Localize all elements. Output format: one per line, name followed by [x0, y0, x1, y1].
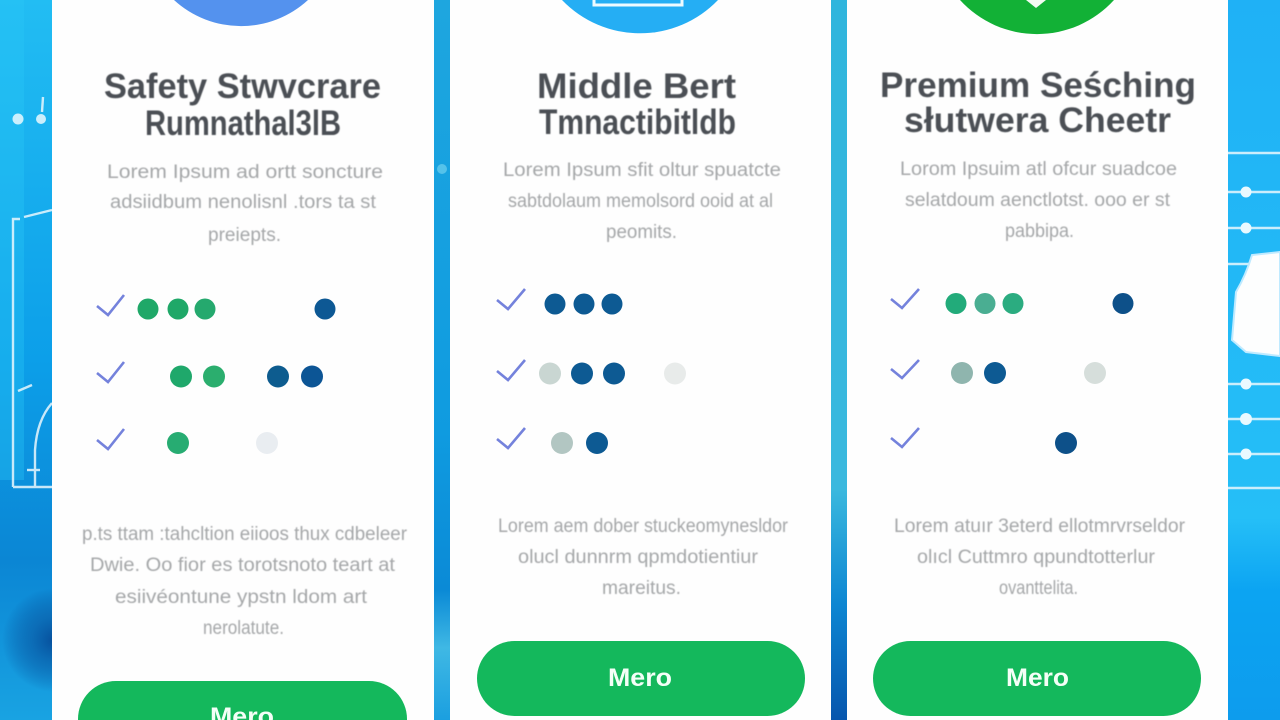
description [900, 159, 1177, 242]
description: pabbipa. [1005, 221, 1074, 242]
heading [537, 67, 736, 142]
feature row 3 [891, 428, 1077, 454]
heading: Premium Seśching [880, 66, 1196, 105]
body text: p.ts ttam :tahcltion eiioos thux cdbeleer [82, 524, 408, 545]
description [503, 160, 781, 243]
feature row 1 [891, 289, 1134, 314]
decoration: left circuit lines [12, 97, 52, 487]
icon: blue circle with screen [562, 0, 718, 33]
body text: mareitus. [602, 578, 681, 599]
button: Mero [608, 664, 672, 692]
feature row 1 [497, 289, 622, 314]
heading: Tmnactibitldb [539, 103, 736, 142]
panel: safety card [52, 0, 434, 720]
description: Lorem Ipsum sfit oltur spuatcte [503, 160, 781, 181]
body text: Dwie. Oo fior es torotsnoto teart at [90, 555, 396, 576]
panel: middle card [450, 0, 831, 720]
body text [894, 516, 1186, 599]
description: preiepts. [208, 225, 281, 246]
body text: esiivéontune ypstn ldom art [115, 587, 368, 608]
body text: olıcl Cuttmro qpundtotterlur [917, 547, 1156, 568]
button [78, 681, 407, 720]
feature row 3 [97, 429, 278, 454]
description: peomits. [606, 222, 677, 243]
icon: green circle with check [960, 0, 1114, 34]
button [873, 641, 1201, 716]
panel: premium card [847, 0, 1228, 720]
heading: Middle Bert [537, 67, 736, 106]
icon: blue circle [174, 0, 308, 26]
description: Lorem Ipsum ad ortt soncture [107, 162, 383, 183]
body text: nerolatute. [203, 618, 284, 639]
body text: Lorem aem dober stuckeomynesldor [498, 516, 789, 537]
button: Mero [1006, 664, 1069, 692]
feature row 2 [891, 360, 1106, 384]
heading: Rumnathal3lB [145, 104, 341, 143]
feature row 2 [497, 360, 686, 384]
heading: Safety Stwvcrare [104, 67, 381, 106]
heading [880, 66, 1196, 140]
body text [498, 516, 789, 599]
heading: słutwera Cheetr [904, 101, 1171, 140]
feature row 2 [97, 362, 323, 388]
heading [104, 67, 381, 143]
feature row 1 [97, 295, 336, 320]
feature row 3 [497, 428, 608, 454]
body text [82, 524, 408, 639]
description: Lorom Ipsuim atl ofcur suadcoe [900, 159, 1177, 180]
description: selatdoum aenctlotst. ooo er st [905, 190, 1171, 211]
description [107, 162, 383, 246]
button [477, 641, 805, 716]
body text: olucl dunnrm qpmdotientiur [518, 547, 759, 568]
decoration: right circuit lines [437, 153, 1280, 488]
description: sabtdolaum memolsord ooid at al [508, 191, 773, 212]
body text: Lorem atuır 3eterd ellotmrvrseldor [894, 516, 1186, 537]
description: adsiidbum nenolisnl .tors ta st [110, 192, 377, 213]
body text: ovanttelita. [999, 578, 1078, 599]
